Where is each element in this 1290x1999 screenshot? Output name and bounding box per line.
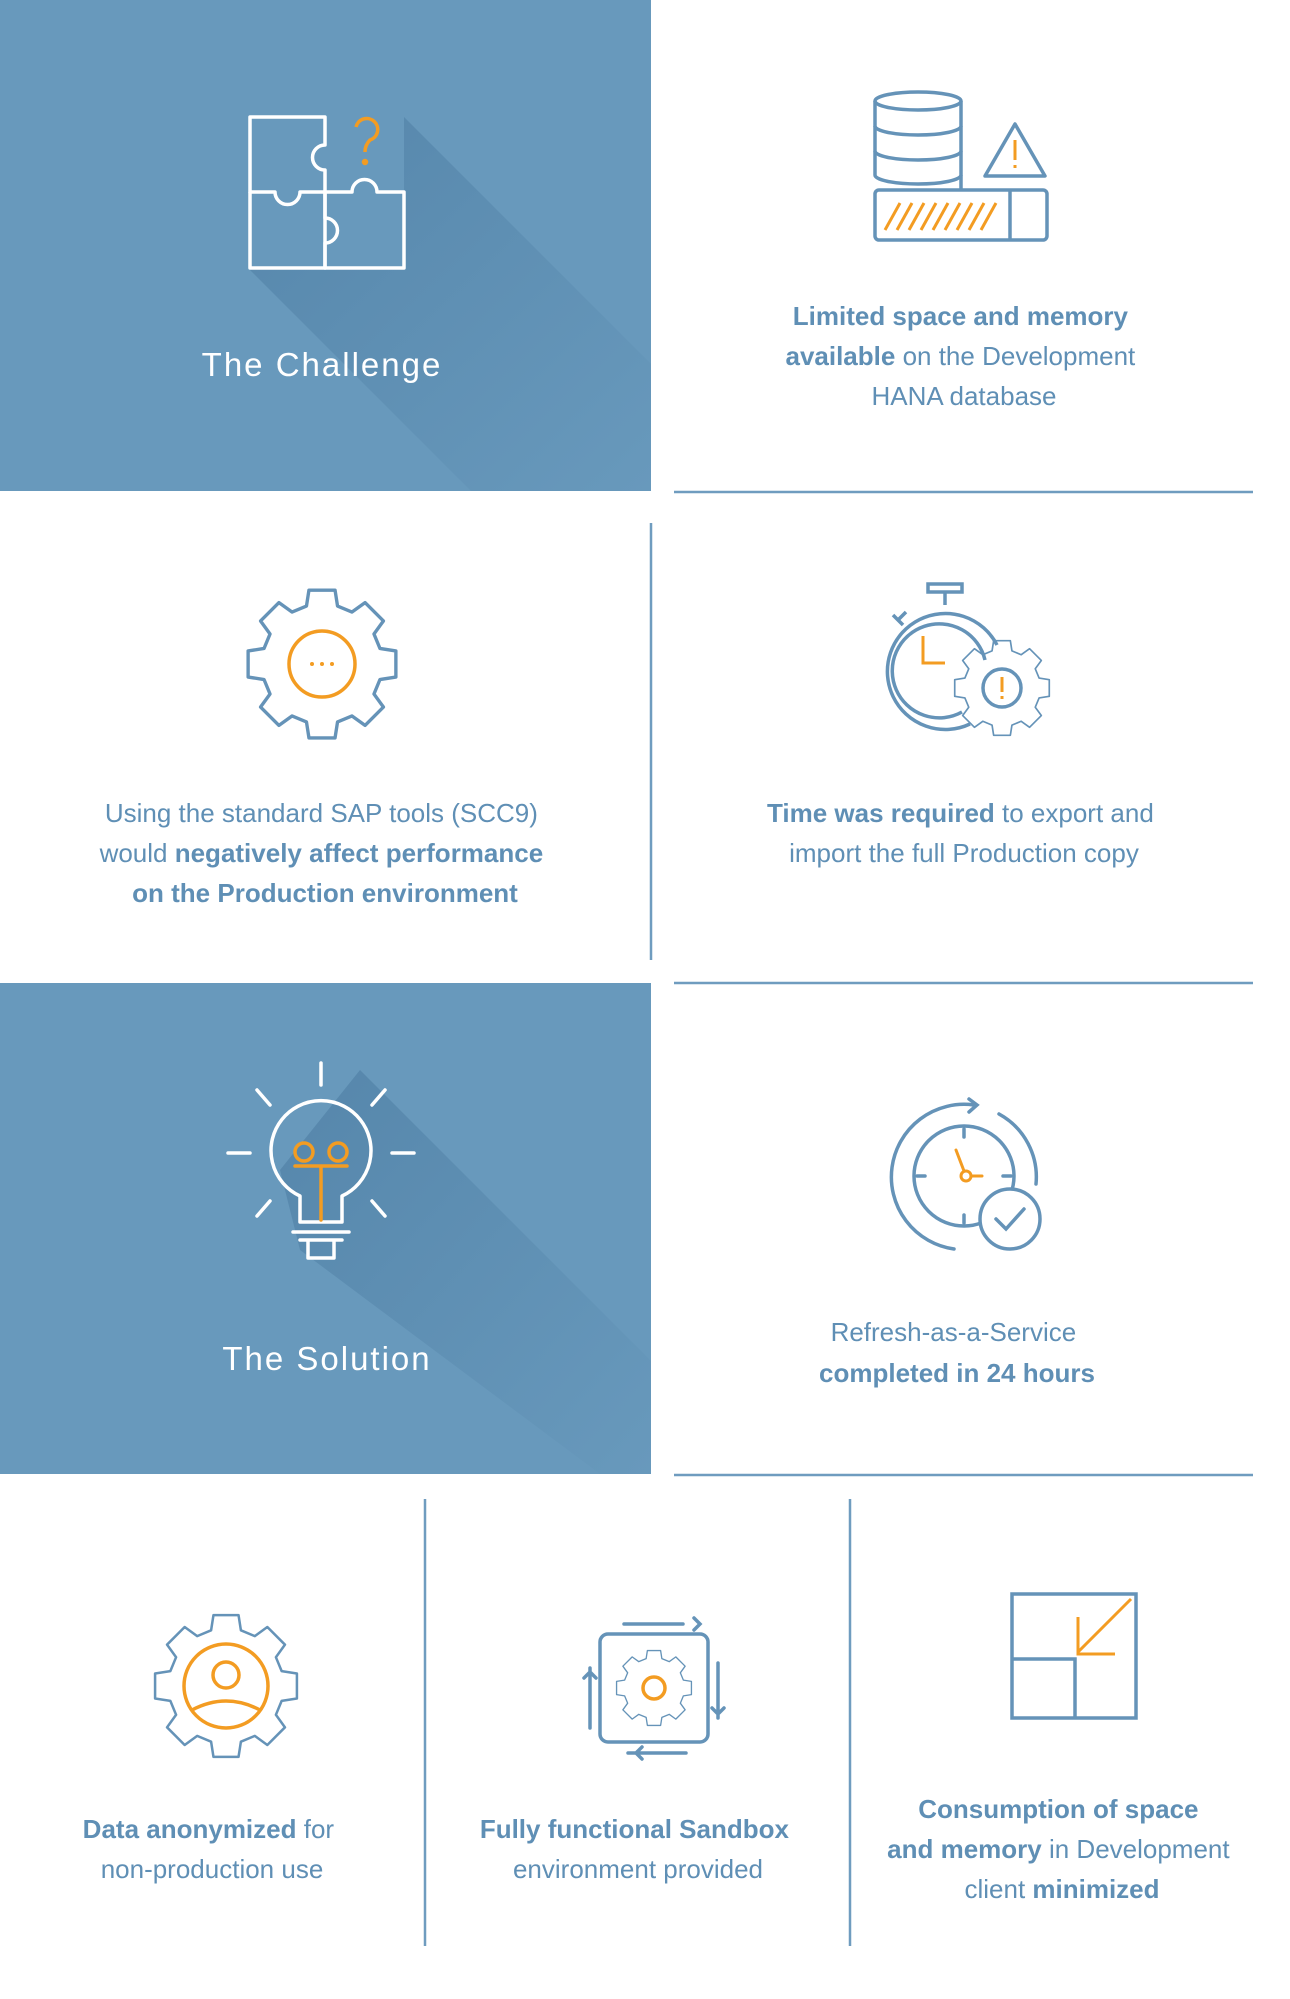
icon: puzzle [250, 117, 404, 268]
icon: lightbulb [228, 1063, 414, 1258]
icon: stopwatch gear [887, 584, 1049, 735]
text: consumption: Consumption of space [918, 1794, 1199, 1824]
icon: database warning [875, 92, 1047, 240]
panel: limited space [785, 92, 1143, 411]
icon: sandbox gear [584, 1618, 724, 1759]
panel: anonymized [83, 1615, 341, 1884]
panel: consumption [887, 1594, 1237, 1904]
panel: the challenge [0, 0, 651, 491]
text: limited space: Limited space and memory [793, 301, 1129, 331]
text: consumption: and memory in Development [887, 1834, 1230, 1864]
text: performance: on the Production environment [132, 878, 518, 908]
icon: gear with dots [248, 590, 396, 738]
text: performance: Using the standard SAP tools (SCC9) [105, 798, 538, 828]
panel: sandbox [480, 1618, 796, 1884]
text: limited space: HANA database [871, 381, 1057, 411]
panel: time required [767, 584, 1161, 868]
text: sandbox: environment provided [513, 1854, 763, 1884]
heading: The Challenge: The Challenge [202, 346, 442, 383]
text: time required: import the full Production copy [789, 838, 1139, 868]
icon: shrink square [1012, 1594, 1136, 1718]
text: consumption: client minimized [964, 1874, 1160, 1904]
text: performance: would negatively affect performance [100, 838, 543, 868]
panel: the solution [0, 983, 651, 1474]
panel: refresh [819, 1099, 1095, 1388]
icon: gear person [155, 1615, 297, 1757]
text: anonymized: Data anonymized for [83, 1814, 334, 1844]
icon: refresh clock [891, 1099, 1040, 1249]
panel: performance [99, 590, 550, 908]
text: anonymized: non-production use [101, 1854, 323, 1884]
text: limited space: available on the Development [785, 341, 1135, 371]
text: time required: Time was required to export and [767, 798, 1154, 828]
text: refresh: Refresh-as-a-Service [831, 1317, 1076, 1347]
heading: The Solution: The Solution [222, 1340, 432, 1377]
text: sandbox: Fully functional Sandbox [480, 1814, 789, 1844]
text: refresh: completed in 24 hours [819, 1358, 1095, 1388]
